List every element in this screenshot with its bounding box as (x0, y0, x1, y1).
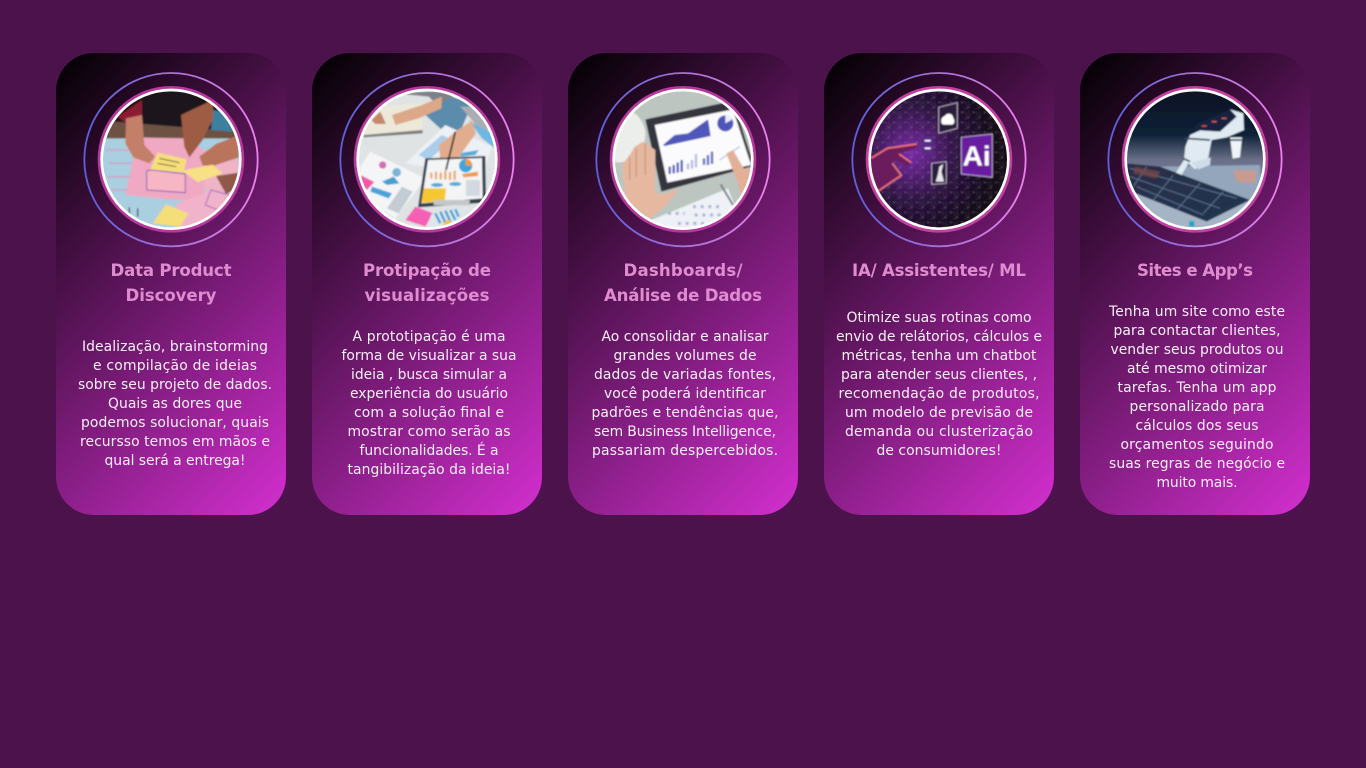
text block: de consumidores! (876, 443, 1002, 459)
text block (592, 329, 778, 459)
text block: experiência do usuário (350, 386, 508, 402)
text block: funcionalidades. É a (360, 441, 498, 459)
heading (110, 261, 232, 305)
panel: Dashboards / Análise de Dados (568, 53, 798, 515)
icon: robot hand on laptop photo with rings (1108, 73, 1282, 246)
text block: Tenha um site como este (1108, 304, 1285, 320)
heading: Data Product (110, 261, 232, 280)
card background (1080, 53, 1310, 515)
text block: Otimize suas rotinas como (846, 310, 1032, 326)
panel: Protipação de visualizações (312, 53, 542, 515)
text block: Ao consolidar e analisar (602, 329, 769, 345)
text block (342, 329, 516, 478)
card background (568, 53, 798, 515)
text block: suas regras de negócio e (1109, 456, 1285, 472)
heading: Discovery (126, 286, 217, 305)
text block: um modelo de previsão de (845, 405, 1033, 421)
text block: para atender seus clientes, , (841, 367, 1037, 383)
text block: envio de relátorios, cálculos e (836, 329, 1042, 345)
text block: qual será a entrega! (104, 453, 246, 469)
heading: Protipação de (363, 261, 491, 280)
text block: ideia , busca simular a (351, 367, 507, 383)
text block: até mesmo otimizar (1127, 361, 1267, 377)
text block: para contactar clientes, (1114, 323, 1280, 339)
text block: orçamentos seguindo (1120, 437, 1274, 453)
text block (1108, 304, 1285, 491)
text block: demanda ou clusterização (845, 424, 1033, 440)
text block: grandes volumes de (614, 348, 756, 364)
heading: IA/ Assistentes/ ML (852, 261, 1026, 280)
text block: vender seus produtos ou (1110, 342, 1284, 358)
text block: dados de variadas fontes, (594, 367, 776, 383)
text block: mostrar como serão as (348, 424, 510, 440)
text block: sem Business Intelligence, (594, 424, 776, 440)
card background (824, 53, 1054, 515)
text block: podemos solucionar, quais (81, 415, 269, 431)
text block: cálculos dos seus (1136, 418, 1258, 434)
icon: discovery photo with rings (84, 73, 258, 246)
text block: recursso temos em mãos e (80, 434, 270, 450)
text block: recomendação de produtos, (838, 386, 1040, 402)
text block (78, 339, 272, 469)
card background (312, 53, 542, 515)
text block: muito mais. (1156, 475, 1238, 491)
infographic page (56, 53, 1310, 515)
text block: com a solução final e (354, 405, 504, 421)
text block: Quais as dores que (108, 396, 242, 412)
icon: prototyping photo with rings (340, 73, 514, 246)
heading: Análise de Dados (604, 286, 762, 305)
text block: e compilação de ideias (93, 358, 257, 374)
panel: Sites e App's (1080, 53, 1310, 515)
heading (363, 261, 491, 305)
text block: padrões e tendências que, (592, 405, 778, 421)
icon: tablet dashboard photo with rings (591, 73, 770, 246)
card background (56, 53, 286, 515)
text block (836, 310, 1042, 459)
text block: tarefas. Tenha um app (1118, 380, 1277, 396)
panel: IA / Assistentes / ML (824, 53, 1054, 515)
heading (604, 261, 762, 305)
icon: AI photo with rings (852, 73, 1026, 246)
heading: visualizações (364, 286, 490, 305)
text block: métricas, tenha um chatbot (842, 348, 1037, 364)
text block: sobre seu projeto de dados. (78, 377, 272, 393)
text block: A prototipação é uma (352, 329, 506, 345)
text block: personalizado para (1130, 399, 1264, 415)
text block: tangibilização da ideia! (348, 462, 510, 478)
text block: passariam despercebidos. (592, 443, 778, 459)
heading: Sites e App’s (1137, 261, 1253, 280)
icon: AI photo with rings: Ai (963, 141, 991, 172)
panel: Data Product Discovery (56, 53, 286, 515)
text block: você poderá identificar (604, 386, 766, 402)
text block: forma de visualizar a sua (342, 348, 516, 364)
text block: Idealização, brainstorming (82, 339, 268, 355)
heading: Dashboards/ (624, 261, 743, 280)
